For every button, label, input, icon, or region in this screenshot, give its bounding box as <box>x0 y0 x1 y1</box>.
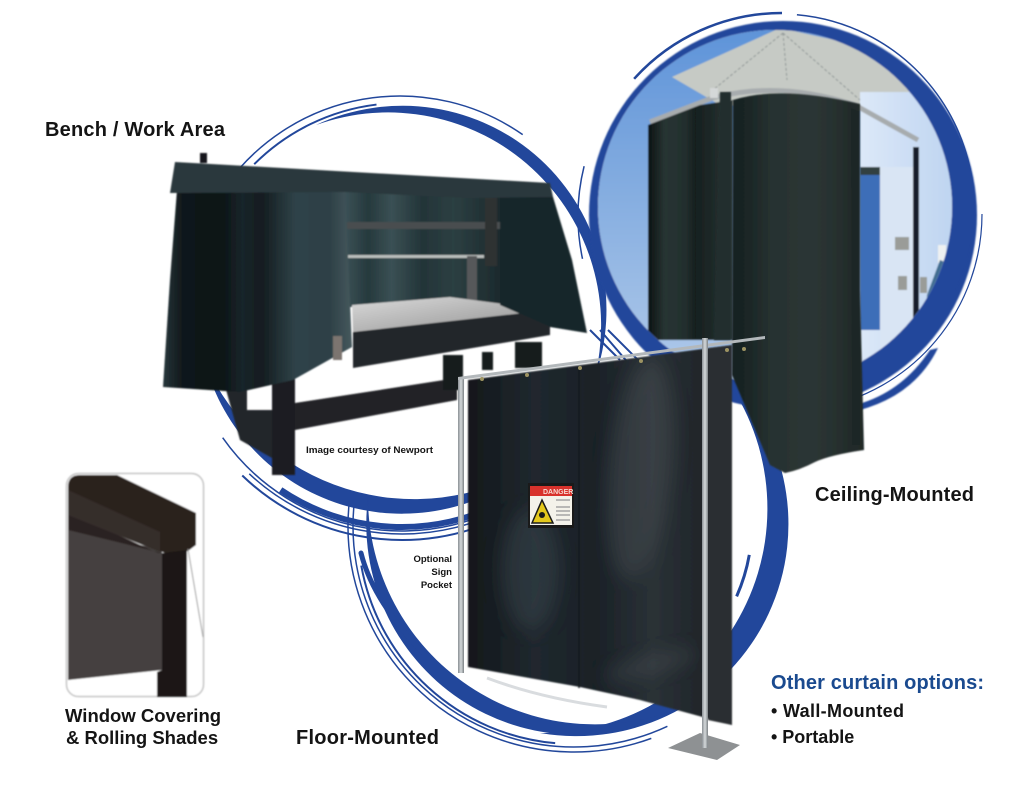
heading: window covering: & Rolling Shades <box>66 727 218 748</box>
caption: optional sign pocket: Sign <box>431 567 452 578</box>
caption: image courtesy: Image courtesy of Newport <box>306 445 434 456</box>
callout: other curtain options <box>771 672 984 747</box>
panel: window covering photo <box>66 474 204 697</box>
window shade <box>68 528 162 680</box>
top rail <box>458 336 765 380</box>
heading: ceiling-mounted: Ceiling-Mounted <box>815 484 974 506</box>
doorway <box>860 167 880 330</box>
thin ring strokes around ceiling circle <box>501 0 1032 493</box>
right post <box>702 338 708 748</box>
heading: floor-mounted: Floor-Mounted <box>296 727 439 749</box>
panel: bench blue brush ring <box>93 1 711 619</box>
callout: other curtain options: • Wall-Mounted <box>771 701 904 721</box>
grommets <box>480 347 746 381</box>
left post <box>458 377 464 673</box>
pull cord <box>188 549 203 637</box>
panel: bench / work area curtain photo <box>163 153 587 475</box>
back curtain <box>345 185 500 307</box>
panel: ring streaks beside floor curtain <box>487 330 640 707</box>
heading: window covering: Window Covering <box>65 705 221 726</box>
panel: ceiling curtain front <box>714 92 864 473</box>
icon: danger sign: DANGER <box>543 489 573 496</box>
valance <box>170 162 553 198</box>
rear curtain <box>648 100 733 340</box>
panel: floor-mounted curtain photo <box>458 336 765 760</box>
left curtain <box>163 190 352 392</box>
legs and crossbar <box>225 386 272 458</box>
caption: optional sign pocket: Pocket <box>421 580 453 591</box>
callout: other curtain options: • Portable <box>771 727 854 747</box>
callout: other curtain options: Other curtain options: <box>771 672 984 694</box>
base plate <box>668 733 740 760</box>
heading: bench / work area: Bench / Work Area <box>45 119 226 141</box>
table <box>352 297 550 332</box>
caption: optional sign pocket: Optional <box>413 554 452 565</box>
curtain <box>468 345 732 725</box>
window headrail <box>68 475 196 553</box>
panel: floor blue brush ring <box>280 232 868 804</box>
rods and frame <box>347 222 508 229</box>
side curtain right <box>500 197 587 333</box>
panel: ceiling-mounted room photo <box>589 20 977 410</box>
window frame post <box>157 550 187 697</box>
icon: danger sign <box>528 483 574 528</box>
